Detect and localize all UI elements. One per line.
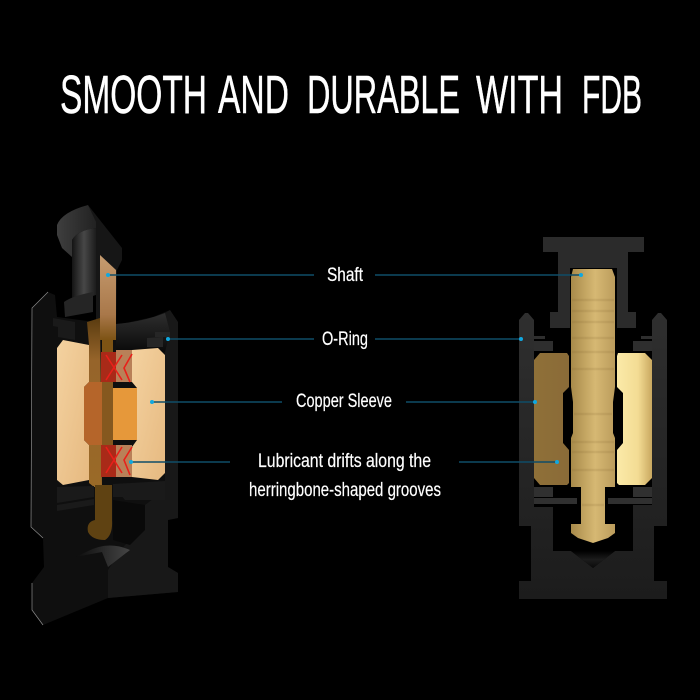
callout: o-ring: O-Ring [322, 329, 368, 350]
stem flange [64, 292, 93, 317]
sleeve right [617, 353, 652, 485]
shaft [571, 269, 615, 543]
callout: o-ring [166, 329, 523, 350]
upper shaft [100, 255, 116, 340]
housing edge highlight [31, 292, 48, 625]
lower seals [534, 487, 652, 504]
stem cap [57, 205, 96, 257]
housing right wall [108, 310, 178, 598]
upper groove background [101, 352, 116, 382]
title [60, 65, 642, 125]
title: DURABLE [307, 65, 460, 125]
callout: shaft [106, 265, 583, 286]
right diagram: cross section [519, 237, 667, 599]
title: FDB [582, 65, 642, 125]
callout: lubricant: herringbone-shaped grooves [249, 480, 441, 501]
upper left o-ring [53, 318, 75, 340]
inner cavity shade [113, 500, 145, 545]
inner cavity wall [116, 313, 170, 352]
shaft collar [102, 340, 113, 352]
callout: lubricant: Lubricant drifts along the [258, 451, 431, 472]
title: WITH [476, 65, 563, 125]
stem cut face [88, 205, 122, 330]
callout: copper sleeve: Copper Sleeve [296, 391, 392, 412]
cap [543, 237, 644, 328]
title: SMOOTH [60, 65, 207, 125]
sleeve left [534, 353, 569, 485]
upper right o-ring [147, 332, 170, 347]
title: AND [218, 65, 289, 125]
left diagram: cutaway bearing [31, 205, 178, 625]
pivot cone [571, 551, 615, 568]
copper sleeve left [57, 340, 89, 485]
stem cylinder [72, 228, 96, 302]
callout: copper sleeve [150, 391, 537, 412]
upper herringbone grooves [106, 354, 132, 382]
callout: lubricant [129, 451, 559, 501]
central shaft [102, 382, 113, 445]
inner brown column [87, 318, 102, 487]
lower herringbone grooves [106, 447, 132, 475]
lower groove background [101, 445, 116, 477]
callout: shaft: Shaft [327, 265, 364, 286]
upper seals [529, 336, 657, 351]
pivot cone pocket [75, 545, 130, 567]
housing [519, 313, 667, 599]
shaft neck and bulb [88, 485, 112, 540]
brushed shaft streaks [572, 300, 614, 505]
lower plate layers [57, 481, 165, 511]
copper sleeve right [132, 348, 165, 480]
outer housing [31, 292, 178, 625]
left oil chamber [84, 382, 102, 445]
orange oil chamber [113, 388, 137, 440]
